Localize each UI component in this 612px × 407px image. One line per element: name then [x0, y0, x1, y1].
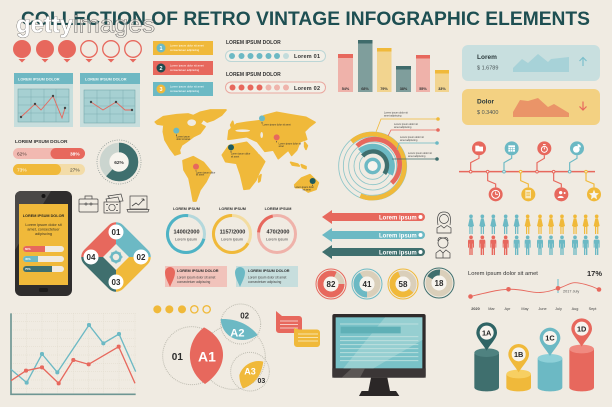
callout: red	[165, 266, 227, 287]
donut gauge 41: 41	[363, 280, 372, 289]
progress ring 1400/2000: 1400/2000	[174, 230, 200, 236]
label 1: Lorem ipsum dolor sit amet	[170, 44, 204, 48]
dot rating 02: LOREM IPSUM DOLOR	[226, 72, 281, 78]
map pin captions: sit amet	[303, 189, 311, 192]
bar chart: 54%	[342, 87, 350, 91]
radial chart callout lines: amet adipiscing	[384, 114, 402, 118]
arrow banner: teal: Lorem ipsum	[379, 234, 417, 240]
step 02: 02	[137, 253, 146, 262]
label 1: consectetuer adipiscing	[170, 48, 200, 52]
women row	[468, 214, 600, 234]
watermark: gettyimages: getty	[16, 12, 74, 38]
panel: Dolor stat card: Dolor	[477, 98, 494, 106]
percentage bars: 38%	[70, 152, 80, 158]
panel: Dolor stat card: $ 0.3400	[477, 110, 498, 116]
callout: teal: consectetuer adipiscing	[248, 280, 282, 284]
trend line chart: Mar	[488, 307, 496, 311]
bar chart	[338, 40, 449, 92]
label 3	[153, 82, 213, 96]
icon: man avatar	[436, 238, 450, 258]
phone mockup: amet, consectetuer	[27, 228, 60, 232]
bar chart: 68%	[361, 87, 369, 91]
bar chart: 33%	[438, 87, 446, 91]
icon: clock node	[489, 187, 503, 201]
percentage bars	[13, 139, 85, 175]
phone mockup	[15, 191, 72, 296]
map pin captions: Lorem ipsum dolor	[196, 171, 216, 174]
map pin captions: dolor sit amet	[176, 138, 191, 141]
label 3: 3	[159, 87, 163, 93]
numbered label list	[153, 41, 213, 96]
trend line chart	[468, 269, 602, 311]
progress ring 470/2000	[257, 207, 297, 254]
world map	[155, 110, 318, 201]
dot rating 02	[226, 72, 326, 93]
trend line chart: Lorem ipsum dolor sit amet	[468, 271, 538, 277]
radial chart callout lines: Lorem ipsum dolor sit	[408, 152, 432, 155]
panel: Dolor stat card	[462, 89, 600, 125]
arrow banner: dark teal	[322, 245, 425, 259]
panel: Lorem stat card: $ 1.6789	[477, 66, 498, 72]
icon: pie node	[570, 141, 584, 155]
venn diagram: 02	[240, 312, 250, 321]
phone progress bars: 75%	[25, 267, 31, 271]
step 01: 01	[112, 228, 121, 237]
trend line chart: Apr	[505, 307, 511, 311]
large line chart	[11, 313, 136, 394]
progress ring 1157/2000: Lorem ipsum	[221, 238, 243, 242]
label 2	[153, 61, 213, 75]
panel: small line chart 1: LOREM IPSUM DOLOR	[18, 78, 60, 82]
trend line chart: Sept	[589, 307, 597, 311]
map pin captions: Lorem ipsum dolor sit	[279, 142, 301, 145]
map pin captions: Lorem ipsum dolor	[295, 186, 314, 189]
icon: star node	[587, 187, 601, 201]
map pin captions	[176, 123, 314, 192]
donut chart 62%	[97, 140, 141, 184]
icon: laptop	[127, 196, 149, 212]
progress ring 470/2000: LOREM IPSUM	[265, 207, 291, 211]
percentage bars: 27%	[70, 168, 80, 174]
concentric radial chart	[339, 132, 407, 200]
label 3: consectetuer adipiscing	[170, 89, 200, 93]
trend line chart: 2017 July	[563, 290, 579, 294]
panel: small line chart 2	[80, 73, 140, 127]
trend line chart: Aug	[572, 307, 578, 311]
icon: user node	[554, 187, 568, 201]
callout: teal: Lorem ipsum dolor sit amet	[248, 276, 287, 280]
panel: Lorem stat card: Lorem	[477, 54, 497, 61]
map pin captions: Lorem ipsum	[176, 135, 190, 138]
panel: small line chart 2: LOREM IPSUM DOLOR	[85, 78, 127, 82]
title: COLLECTION OF RETRO VINTAGE INFOGRAPHIC ELEMENTS	[21, 8, 590, 30]
label 3: Lorem ipsum dolor sit amet	[170, 84, 204, 88]
progress ring 1157/2000: LOREM IPSUM	[219, 207, 246, 211]
venn diagram	[153, 304, 269, 391]
speech bubble: red	[276, 311, 302, 333]
panel: small line chart 1	[14, 73, 73, 127]
donut chart 62%: 62%	[114, 160, 125, 166]
progress ring 1157/2000: 1157/2000	[220, 230, 245, 236]
label 2: consectetuer adipiscing	[170, 68, 200, 72]
trend line chart: May	[521, 307, 529, 311]
arrow banner: red: Lorem ipsum	[379, 216, 417, 222]
radial chart callout lines: Lorem ipsum dolor sit	[394, 123, 418, 126]
dot rating 01	[226, 40, 326, 62]
watermark: gettyimages: images	[73, 12, 155, 38]
dot rating 01: Lorem 01	[294, 54, 320, 60]
donut gauge 18: 18	[435, 279, 444, 288]
icon: briefcase	[79, 196, 98, 212]
label 1: 1	[159, 46, 163, 52]
trend line chart: June	[538, 307, 547, 311]
cylinder 1B: 1B	[514, 350, 523, 359]
label 1	[153, 41, 213, 55]
cylinder 1D: 1D	[577, 324, 586, 333]
cylinder 1A: 1A	[482, 328, 492, 337]
trend line chart: 17%	[587, 269, 602, 278]
pin markers row	[13, 40, 141, 62]
venn diagram: A3	[244, 367, 256, 377]
icon: money	[104, 194, 123, 213]
radial chart callout lines: Lorem ipsum dolor sit	[400, 136, 424, 139]
venn diagram: 03	[257, 378, 265, 385]
speech bubble: yellow	[294, 328, 320, 347]
monitor stand	[359, 378, 399, 396]
map pin captions: Lorem ipsum dolor sit amet	[263, 123, 291, 126]
percentage bars: LOREM IPSUM DOLOR	[15, 139, 68, 145]
bar chart: 55%	[419, 87, 427, 91]
icon: down arrow	[580, 102, 586, 110]
progress ring 1400/2000	[163, 207, 209, 257]
donut gauge 18	[424, 268, 454, 298]
donut gauge 82	[316, 269, 346, 299]
dot rating 02: Lorem 02	[294, 86, 320, 92]
map pin captions: Lorem ipsum dolor	[231, 153, 251, 156]
callout: red: Lorem ipsum dolor sit amet	[177, 276, 216, 280]
diamond process diagram	[81, 222, 151, 292]
radial chart callout lines: amet adipiscing	[408, 155, 426, 158]
radial chart callout lines: Lorem ipsum dolor sit	[384, 112, 408, 114]
map cutouts	[187, 119, 263, 154]
venn diagram: A1	[198, 348, 216, 364]
bar chart: 38%	[400, 87, 408, 91]
callout: teal: LOREM IPSUM DOLOR	[248, 269, 290, 273]
label 2: 2	[159, 66, 163, 72]
icon: up arrow	[580, 58, 586, 66]
cylinder chart	[474, 318, 594, 391]
bar chart: 79%	[380, 87, 388, 91]
dot rating 01: LOREM IPSUM DOLOR	[226, 40, 281, 46]
donut gauge 58: 58	[399, 280, 408, 289]
progress dots	[153, 305, 210, 313]
arrow banner: dark teal: Lorem ipsum	[379, 250, 417, 256]
icon: gear	[110, 250, 122, 264]
donut gauge 58	[388, 269, 418, 299]
callout: teal	[235, 266, 298, 287]
men row	[468, 235, 600, 255]
radial chart callout lines: amet adipiscing	[394, 126, 412, 129]
progress ring 470/2000: Lorem ipsum	[266, 238, 288, 242]
progress ring 1157/2000	[207, 207, 257, 259]
phone progress bars	[23, 246, 64, 272]
label 2: Lorem ipsum dolor sit amet	[170, 64, 204, 68]
callout: red: LOREM IPSUM DOLOR	[177, 269, 219, 273]
donut gauge 82: 82	[327, 280, 336, 289]
radial chart callout lines	[376, 112, 440, 161]
progress ring 1400/2000: Lorem ipsum	[175, 238, 197, 242]
phone mockup: Lorem ipsum dolor sit	[25, 223, 63, 227]
timeline	[459, 141, 601, 201]
percentage bars: 62%	[17, 152, 27, 158]
callout: red: consectetuer adipiscing	[177, 280, 211, 284]
arrow banner: teal	[322, 228, 425, 242]
progress ring 1400/2000: LOREM IPSUM	[173, 207, 200, 211]
icon: stopwatch node	[537, 141, 551, 155]
percentage bars: 73%	[17, 168, 27, 174]
cylinder 1C: 1C	[545, 334, 555, 343]
watermark: gettyimages	[16, 12, 155, 38]
icon: woman avatar	[437, 212, 451, 233]
step 03: 03	[112, 278, 121, 287]
arrow banner: red	[322, 210, 425, 224]
phone mockup: adipiscing	[35, 232, 52, 236]
phone mockup: LOREM IPSUM DOLOR	[23, 214, 65, 218]
venn diagram: 01	[172, 352, 183, 363]
map pins	[173, 115, 316, 186]
people pictogram chart	[468, 214, 600, 255]
radial chart callout lines: amet adipiscing	[400, 139, 418, 142]
trend line chart: July	[555, 307, 562, 311]
progress ring 470/2000: 470/2000	[267, 230, 289, 236]
donut gauge 41	[352, 269, 382, 299]
map pin captions: sit amet	[196, 174, 205, 177]
panel: Lorem stat card	[462, 45, 600, 81]
venn diagram: A2	[230, 327, 245, 339]
phone progress bars: 45%	[25, 257, 31, 261]
phone progress bars: 60%	[25, 247, 31, 251]
map pin captions: sit amet	[231, 155, 240, 158]
step 04: 04	[87, 253, 96, 262]
icon: folder node	[472, 141, 486, 155]
trend line chart: 2020	[471, 307, 480, 311]
icon: document node	[521, 187, 535, 201]
monitor	[332, 314, 426, 396]
map pin captions: amet	[279, 145, 284, 148]
icon: calendar node	[505, 141, 519, 155]
